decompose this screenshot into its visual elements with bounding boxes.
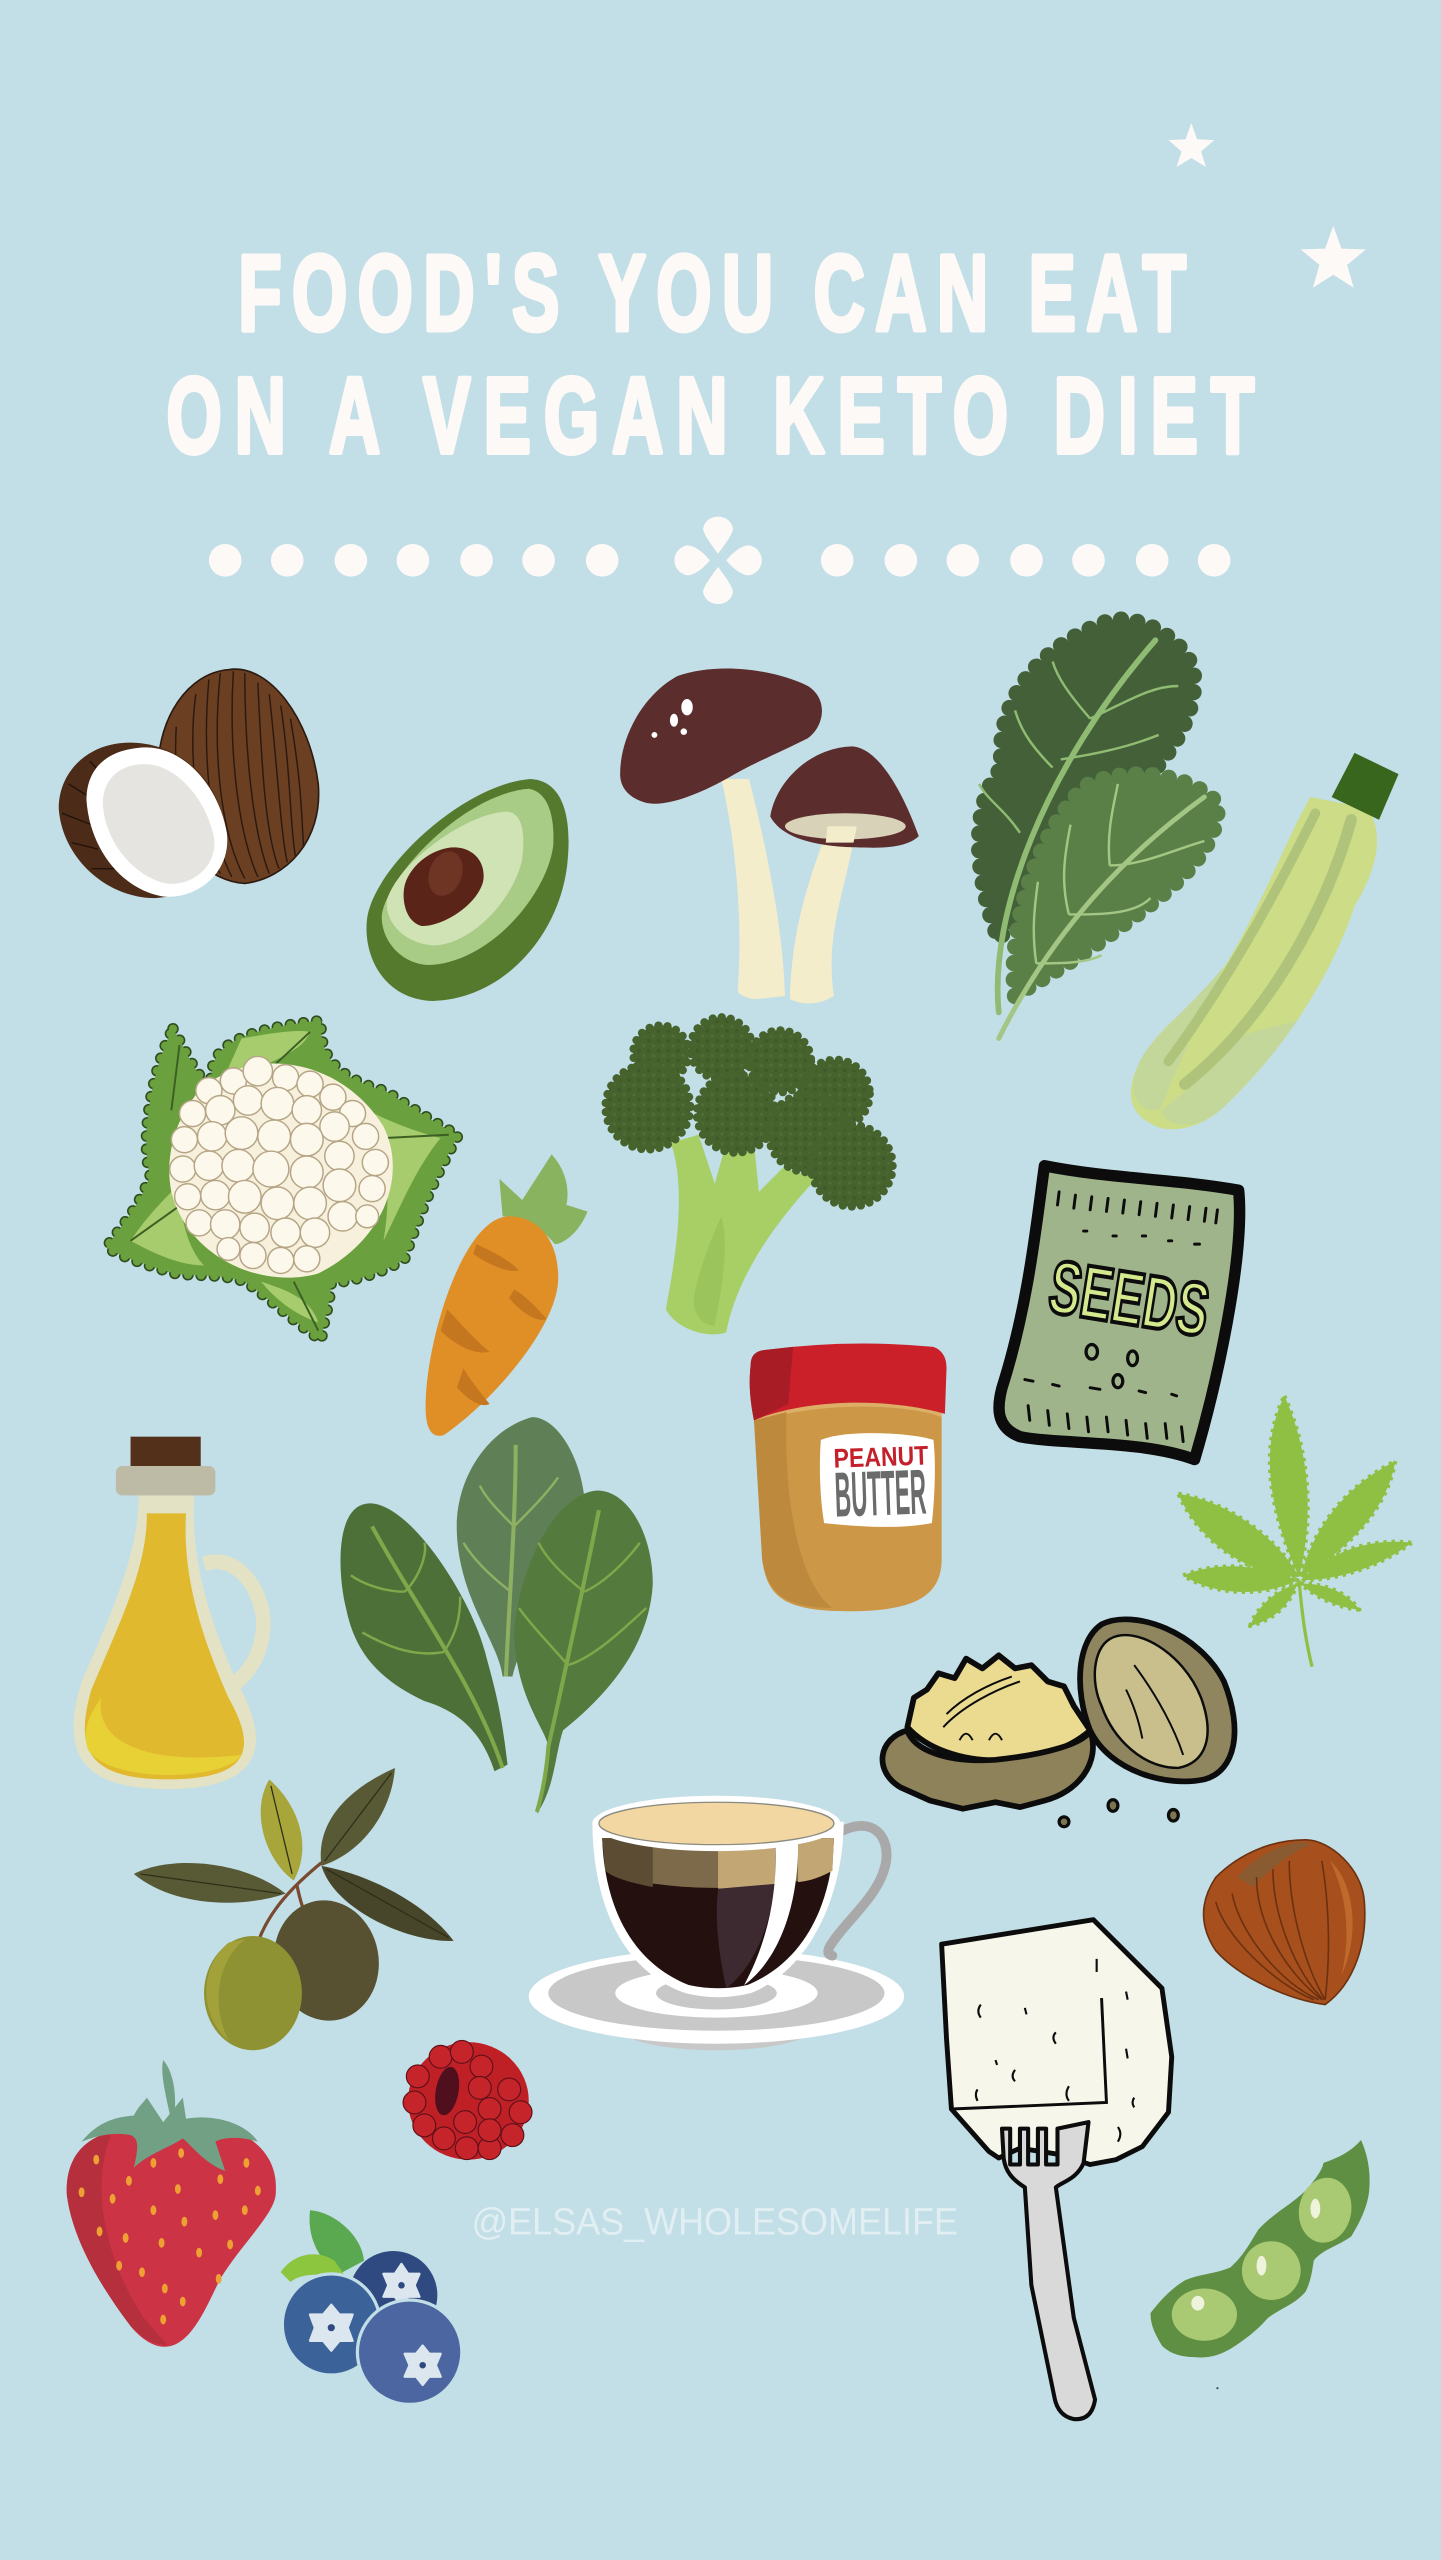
icon: seeds bag: SEEDS — [1044, 1244, 1215, 1352]
icon: avocado — [366, 779, 569, 1001]
watermark: @ELSAS_WHOLESOMELIFE — [472, 2201, 958, 2243]
icon: edamame pod — [1151, 2140, 1370, 2357]
icon: tofu on fork — [942, 1920, 1172, 2419]
icon: strawberry — [67, 2060, 276, 2347]
icon: peanut butter jar: PEANUT — [833, 1440, 929, 1474]
icon: blueberries — [281, 2210, 462, 2404]
icon: zucchini — [1131, 753, 1399, 1129]
divider: dots and flower ornament — [209, 517, 1230, 604]
icon: olive branch — [134, 1768, 454, 2050]
icon: star small — [1168, 123, 1214, 167]
icon: coconut — [59, 669, 319, 898]
icon: broccoli — [605, 1017, 893, 1334]
title — [166, 233, 1254, 476]
icon: mushrooms — [620, 669, 919, 1004]
icon: spinach leaves — [340, 1417, 653, 1814]
title: FOOD'S YOU CAN EAT — [238, 233, 1186, 354]
icon: cauliflower — [106, 1021, 459, 1340]
icon: carrot — [426, 1154, 587, 1436]
icon: peanut butter jar — [750, 1344, 947, 1611]
title: ON A VEGAN KETO DIET — [166, 356, 1254, 476]
icon: hazelnut — [1204, 1840, 1365, 2005]
icon: hemp leaf — [1178, 1396, 1412, 1667]
icon: walnut — [882, 1619, 1235, 1809]
icon: seeds bag — [999, 1166, 1240, 1460]
text: BUTTER — [834, 1456, 927, 1531]
icon: olive oil bottle — [74, 1437, 263, 1789]
icon: walnut crumbs — [1059, 1800, 1178, 1827]
icon: kale — [979, 620, 1218, 1038]
icon: star large — [1301, 226, 1366, 288]
icon: coffee cup and saucer — [529, 1796, 904, 2050]
speck — [1216, 2387, 1219, 2389]
icon: raspberry — [403, 2040, 532, 2160]
